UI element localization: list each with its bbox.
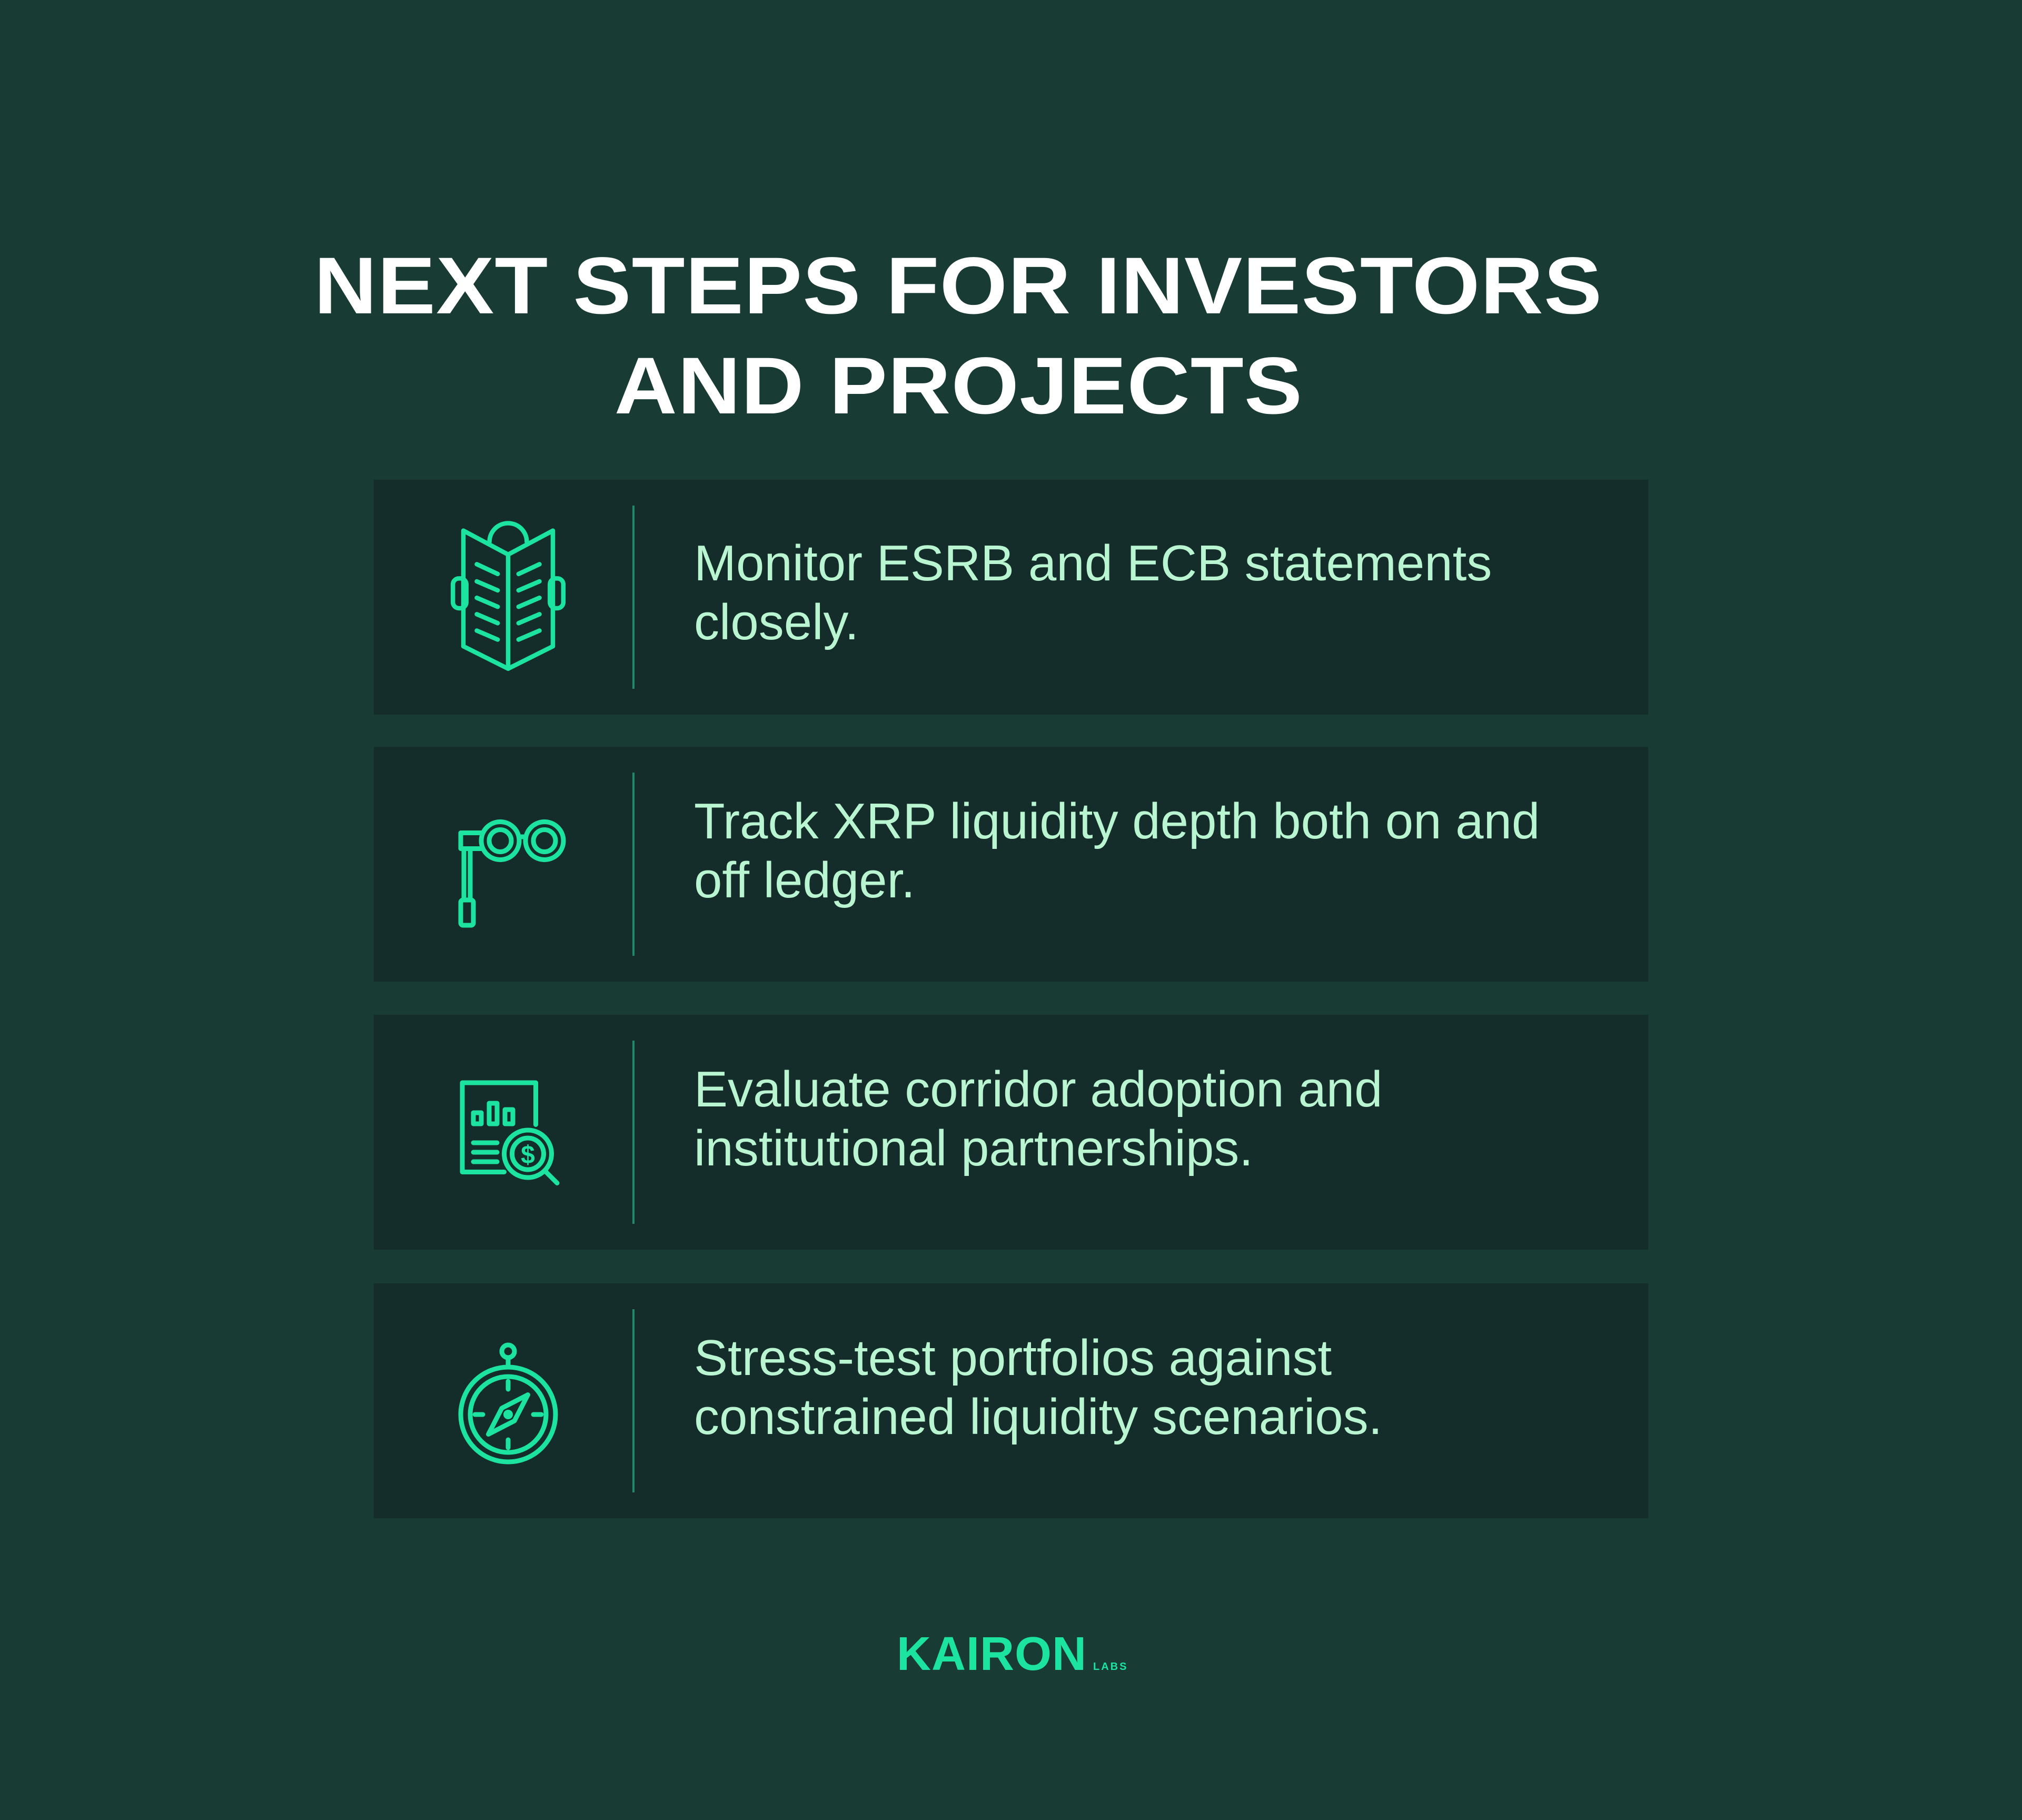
panel: card 1	[374, 480, 1648, 715]
panel: card 3	[374, 1015, 1648, 1250]
title: NEXT STEPS FOR INVESTORS	[314, 241, 1602, 331]
title	[314, 241, 1602, 431]
text	[694, 535, 1492, 650]
text: constrained liquidity scenarios.	[694, 1389, 1382, 1445]
text	[694, 1330, 1382, 1445]
text: institutional partnerships.	[694, 1120, 1253, 1176]
text: closely.	[694, 594, 859, 650]
text: Stress-test portfolios against	[694, 1330, 1332, 1386]
panel: card 4	[374, 1283, 1648, 1518]
icon: binoculars	[458, 819, 566, 928]
text: Track XRP liquidity depth both on and	[694, 793, 1540, 849]
logo: KAIRON LABS	[897, 1628, 1128, 1680]
icon: report with dollar magnifier	[460, 1081, 559, 1185]
icon: newspaper reader	[451, 521, 566, 671]
text	[694, 1061, 1383, 1176]
panel: card 2	[374, 747, 1648, 982]
text: Monitor ESRB and ECB statements	[694, 535, 1492, 591]
icon: report with dollar magnifier: $	[521, 1141, 535, 1169]
title: AND PROJECTS	[614, 341, 1303, 431]
text: off ledger.	[694, 852, 915, 908]
text: Evaluate corridor adoption and	[694, 1061, 1383, 1117]
text	[694, 793, 1540, 908]
icon: stopwatch compass	[458, 1343, 558, 1464]
